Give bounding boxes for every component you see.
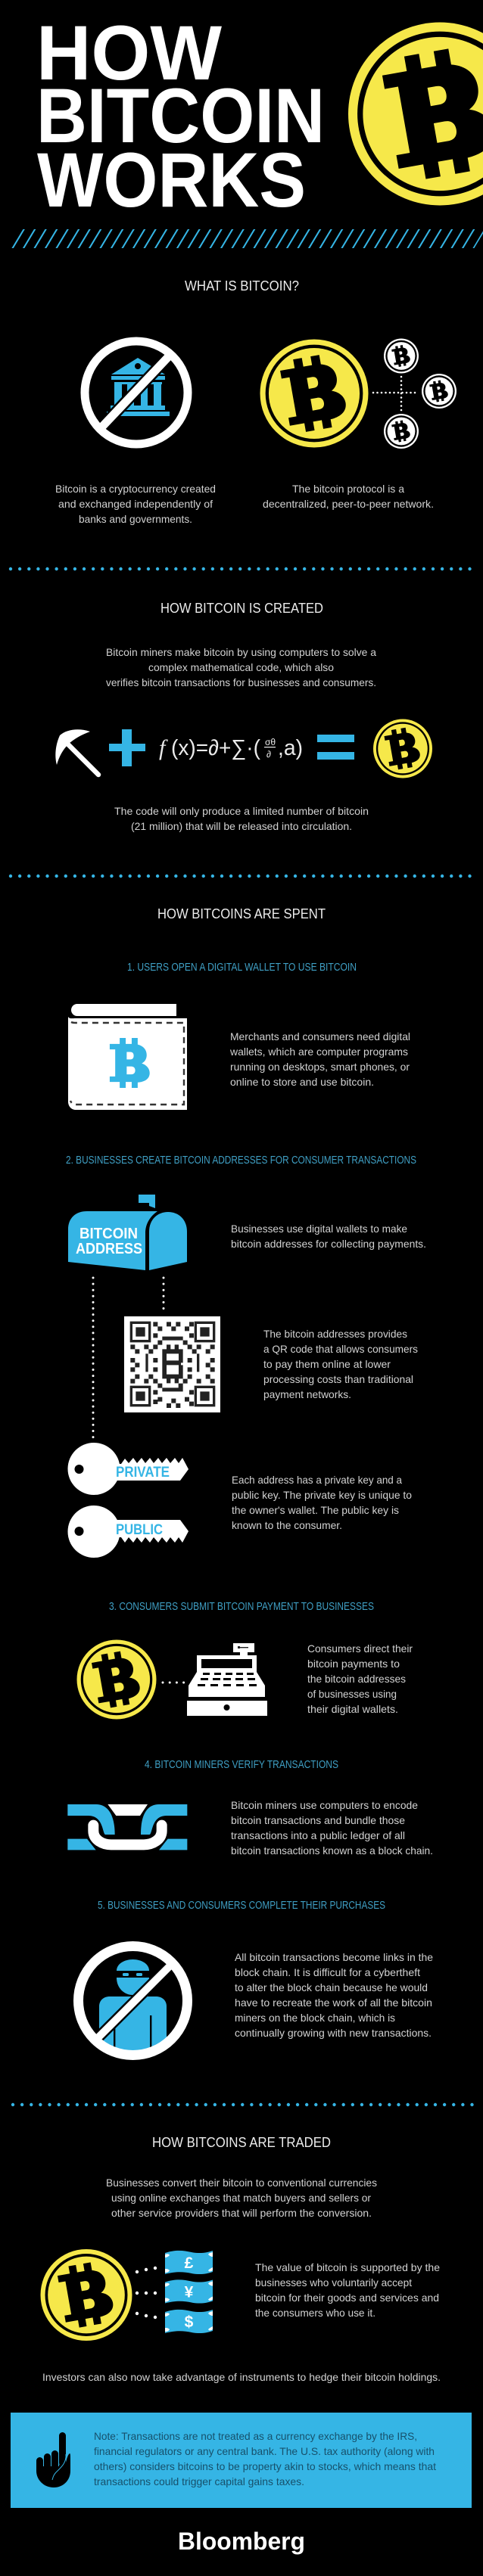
text: limited supply: The code will only produce a limited number of bitcoin xyxy=(114,805,369,817)
text: keys: known to the consumer. xyxy=(232,1519,342,1531)
heading: how bitcoins are traded: HOW BITCOINS ARE TRADED xyxy=(152,2135,331,2150)
text: miners encode: bitcoin transactions known as a block chain. xyxy=(231,1844,433,1857)
main coin xyxy=(260,339,368,448)
logo: Bloomberg: Bloomberg xyxy=(178,2528,305,2555)
text: value of bitcoin: The value of bitcoin is supported by the xyxy=(255,2261,440,2273)
step 5 heading: 5. BUSINESSES AND CONSUMERS COMPLETE THEIR PURCHASES xyxy=(98,1900,385,1912)
icon: mailbox xyxy=(68,1195,187,1270)
formula: (x)=∂+∑·( xyxy=(171,736,260,760)
note text: others) considers bitcoins to be property akin to stocks, which means that xyxy=(94,2460,436,2472)
text: keys: Each address has a private key and a xyxy=(232,1474,402,1486)
title: BITCOIN xyxy=(36,73,325,159)
icon: peer-to-peer network xyxy=(260,339,457,449)
text: miners encode: bitcoin transactions and bundle those xyxy=(231,1814,405,1826)
icon: pointing hand xyxy=(36,2432,70,2487)
dollar bill: $ xyxy=(185,2313,194,2331)
step 4 heading: 4. BITCOIN MINERS VERIFY TRANSACTIONS xyxy=(145,1759,338,1771)
step 2 heading: 2. BUSINESSES CREATE BITCOIN ADDRESSES FOR CONSUMER TRANSACTIONS xyxy=(66,1154,416,1167)
formula xyxy=(159,735,303,760)
text: value of bitcoin: businesses who voluntarily accept xyxy=(255,2276,412,2289)
text: miners intro: Bitcoin miners make bitcoin by using computers to solve a xyxy=(106,646,376,658)
text: direct payments: bitcoin payments to xyxy=(307,1658,400,1670)
text: direct payments: the bitcoin addresses xyxy=(307,1673,406,1685)
network dots xyxy=(373,377,419,412)
step 1 heading: 1. USERS OPEN A DIGITAL WALLET TO USE BITCOIN xyxy=(127,962,357,974)
text: QR code: to pay them online at lower xyxy=(263,1358,391,1370)
text: bitcoin is a cryptocurrency: Bitcoin is a cryptocurrency created xyxy=(55,483,216,495)
dotted divider xyxy=(11,875,470,878)
text: investors: Investors can also now take advantage of instruments to hedge their bitcoin holdings. xyxy=(42,2371,441,2383)
text: direct payments: their digital wallets. xyxy=(307,1703,398,1715)
text: bitcoin is a cryptocurrency: banks and governments. xyxy=(79,513,192,525)
text: QR code: a QR code that allows consumers xyxy=(263,1343,418,1355)
icon: pickaxe xyxy=(55,729,98,775)
text: miners intro xyxy=(106,646,376,688)
text: protocol xyxy=(263,483,434,510)
formula: ∂ xyxy=(266,749,271,760)
text: block chain xyxy=(235,1951,433,2039)
text: value of bitcoin: bitcoin for their goods and services and xyxy=(255,2292,439,2304)
text: limited supply xyxy=(114,805,369,832)
bank building xyxy=(107,358,170,416)
text: block chain: block chain. It is difficult for a cybertheft xyxy=(235,1966,420,1978)
icon: wallet xyxy=(68,1004,187,1110)
text: block chain: continually growing with new transactions. xyxy=(235,2027,432,2039)
text: collecting payments: Businesses use digital wallets to make xyxy=(231,1223,407,1235)
text: protocol: decentralized, peer-to-peer network. xyxy=(263,498,434,510)
text: wallets: online to store and use bitcoin. xyxy=(230,1076,374,1088)
icon: mailbox: ADDRESS xyxy=(76,1241,142,1257)
thief xyxy=(99,1959,167,2050)
heading: how bitcoin is created: HOW BITCOIN IS CREATED xyxy=(160,601,323,616)
text: block chain: miners on the block chain, which is xyxy=(235,2012,395,2024)
formula: ,a) xyxy=(278,736,303,760)
text: value of bitcoin xyxy=(255,2261,440,2319)
striped divider xyxy=(17,229,480,248)
text: direct payments: of businesses using xyxy=(307,1688,397,1700)
dotted connectors xyxy=(93,1278,164,1438)
text: miners intro: verifies bitcoin transactions for businesses and consumers. xyxy=(106,676,376,688)
icon: no thief xyxy=(79,1946,188,2063)
text: bitcoin is a cryptocurrency: and exchanged independently of xyxy=(58,498,213,510)
dotted divider xyxy=(11,567,470,570)
text: direct payments xyxy=(307,1642,413,1715)
text: QR code: The bitcoin addresses provides xyxy=(263,1328,407,1340)
icon: large bitcoin coin xyxy=(348,22,483,205)
text: miners encode: Bitcoin miners use computers to encode xyxy=(231,1799,418,1811)
icon: chain link xyxy=(67,1804,187,1850)
icon: private key: PRIVATE xyxy=(116,1465,170,1481)
icon: mailbox: BITCOIN xyxy=(79,1226,138,1242)
text: conversion: Businesses convert their bitcoin to conventional currencies xyxy=(106,2177,377,2189)
formula: f xyxy=(159,735,168,760)
text: miners intro: complex mathematical code, which also xyxy=(148,661,334,673)
text: wallets: running on desktops, smart phones, or xyxy=(230,1061,410,1073)
text: block chain: All bitcoin transactions become links in the xyxy=(235,1951,433,1963)
dots to currencies xyxy=(136,2267,157,2319)
note text: Note: Transactions are not treated as a currency exchange by the IRS, xyxy=(94,2430,417,2442)
formula: σθ xyxy=(265,737,276,747)
icon: cash register xyxy=(187,1643,267,1716)
text: keys: the owner's wallet. The public key is xyxy=(232,1504,399,1516)
icon: public key: PUBLIC xyxy=(116,1522,163,1538)
text: keys: public key. The private key is unique to xyxy=(232,1489,412,1501)
dots to register xyxy=(163,1681,184,1684)
text: bitcoin is a cryptocurrency xyxy=(55,483,216,525)
text: conversion: using online exchanges that match buyers and sellers or xyxy=(111,2192,371,2204)
text: conversion xyxy=(106,2177,377,2219)
text: block chain: have to recreate the work of all the bitcoin xyxy=(235,1996,432,2009)
text: wallets: Merchants and consumers need digital xyxy=(230,1030,410,1043)
icon: public key xyxy=(68,1506,189,1558)
icon: private key xyxy=(68,1443,189,1495)
note text xyxy=(94,2430,436,2487)
title: HOW xyxy=(36,10,223,96)
note text: financial regulators or any central bank. The U.S. tax authority (along with xyxy=(94,2445,435,2457)
title: WORKS xyxy=(37,137,306,223)
text: limited supply: (21 million) that will be released into circulation. xyxy=(131,820,352,832)
note text: transactions could trigger capital gains taxes. xyxy=(94,2475,304,2487)
text: QR code: payment networks. xyxy=(263,1388,351,1400)
title xyxy=(36,10,325,223)
text: QR code: processing costs than traditional xyxy=(263,1373,413,1385)
text: keys xyxy=(232,1474,412,1531)
peer coins xyxy=(384,339,419,374)
pound bill: £ xyxy=(185,2254,194,2272)
text: collecting payments: bitcoin addresses for collecting payments. xyxy=(231,1238,426,1250)
icon: coin exchange xyxy=(41,2249,132,2341)
text: block chain: to alter the block chain because he would xyxy=(235,1981,428,1993)
icon: plus xyxy=(109,729,145,766)
text: collecting payments xyxy=(231,1223,426,1250)
prohibition sign xyxy=(85,341,188,444)
icon: currency bills xyxy=(165,2251,213,2333)
text: wallets xyxy=(229,1030,410,1088)
panel: note xyxy=(11,2413,472,2508)
yen bill: ¥ xyxy=(185,2283,194,2301)
dotted divider xyxy=(13,2103,472,2106)
icon: equals xyxy=(317,735,354,760)
text: wallets: wallets, which are computer programs xyxy=(229,1046,408,1058)
text: QR code xyxy=(263,1328,418,1400)
heading: how bitcoins are spent: HOW BITCOINS ARE SPENT xyxy=(157,906,326,921)
icon: no banks xyxy=(85,341,188,444)
icon: coin paying xyxy=(77,1640,156,1719)
icon: coin result xyxy=(373,719,432,778)
heading: what is bitcoin: WHAT IS BITCOIN? xyxy=(185,278,299,294)
prohibition sign xyxy=(79,1946,188,2055)
text: conversion: other service providers that will perform the conversion. xyxy=(111,2207,372,2219)
step 3 heading: 3. CONSUMERS SUBMIT BITCOIN PAYMENT TO BUSINESSES xyxy=(109,1601,374,1613)
icon: QR code xyxy=(124,1316,220,1412)
text: direct payments: Consumers direct their xyxy=(307,1642,413,1655)
text: miners encode: transactions into a public ledger of all xyxy=(231,1829,405,1841)
text: value of bitcoin: the consumers who use it. xyxy=(255,2307,375,2319)
text: protocol: The bitcoin protocol is a xyxy=(292,483,404,495)
text: miners encode xyxy=(231,1799,433,1857)
